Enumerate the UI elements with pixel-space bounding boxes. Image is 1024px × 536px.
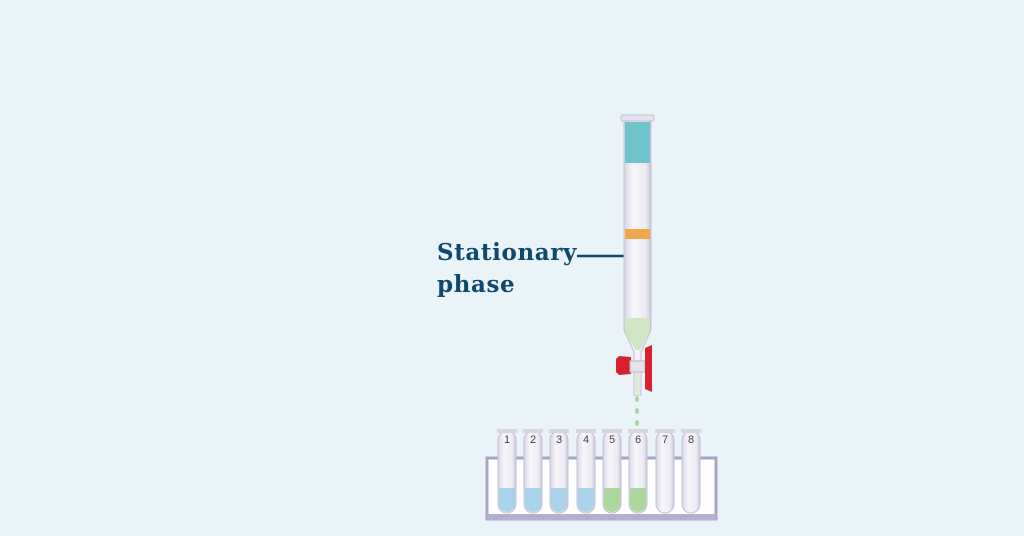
test tubes: 4 bbox=[583, 434, 589, 446]
leader line bbox=[577, 255, 637, 257]
test tubes: 7 bbox=[662, 434, 668, 446]
label: stationary phase: phase bbox=[437, 271, 515, 298]
test tubes: 2 bbox=[530, 434, 536, 446]
label: stationary phase bbox=[437, 239, 577, 298]
drops bbox=[635, 396, 639, 402]
rack back bbox=[487, 458, 716, 519]
test tubes: 6 bbox=[635, 434, 641, 446]
test tubes: 1 bbox=[504, 434, 510, 446]
column bbox=[616, 115, 654, 426]
test tubes: 8 bbox=[688, 434, 694, 446]
orange band bbox=[625, 229, 650, 239]
stopcock bbox=[616, 345, 652, 393]
green band bbox=[625, 318, 650, 350]
test tubes: 3 bbox=[556, 434, 562, 446]
mobile phase liquid bbox=[625, 122, 650, 163]
label: stationary phase: Stationary bbox=[437, 239, 577, 266]
rack front bar bbox=[487, 514, 716, 520]
test tubes bbox=[497, 429, 701, 513]
test tubes: 5 bbox=[609, 434, 615, 446]
